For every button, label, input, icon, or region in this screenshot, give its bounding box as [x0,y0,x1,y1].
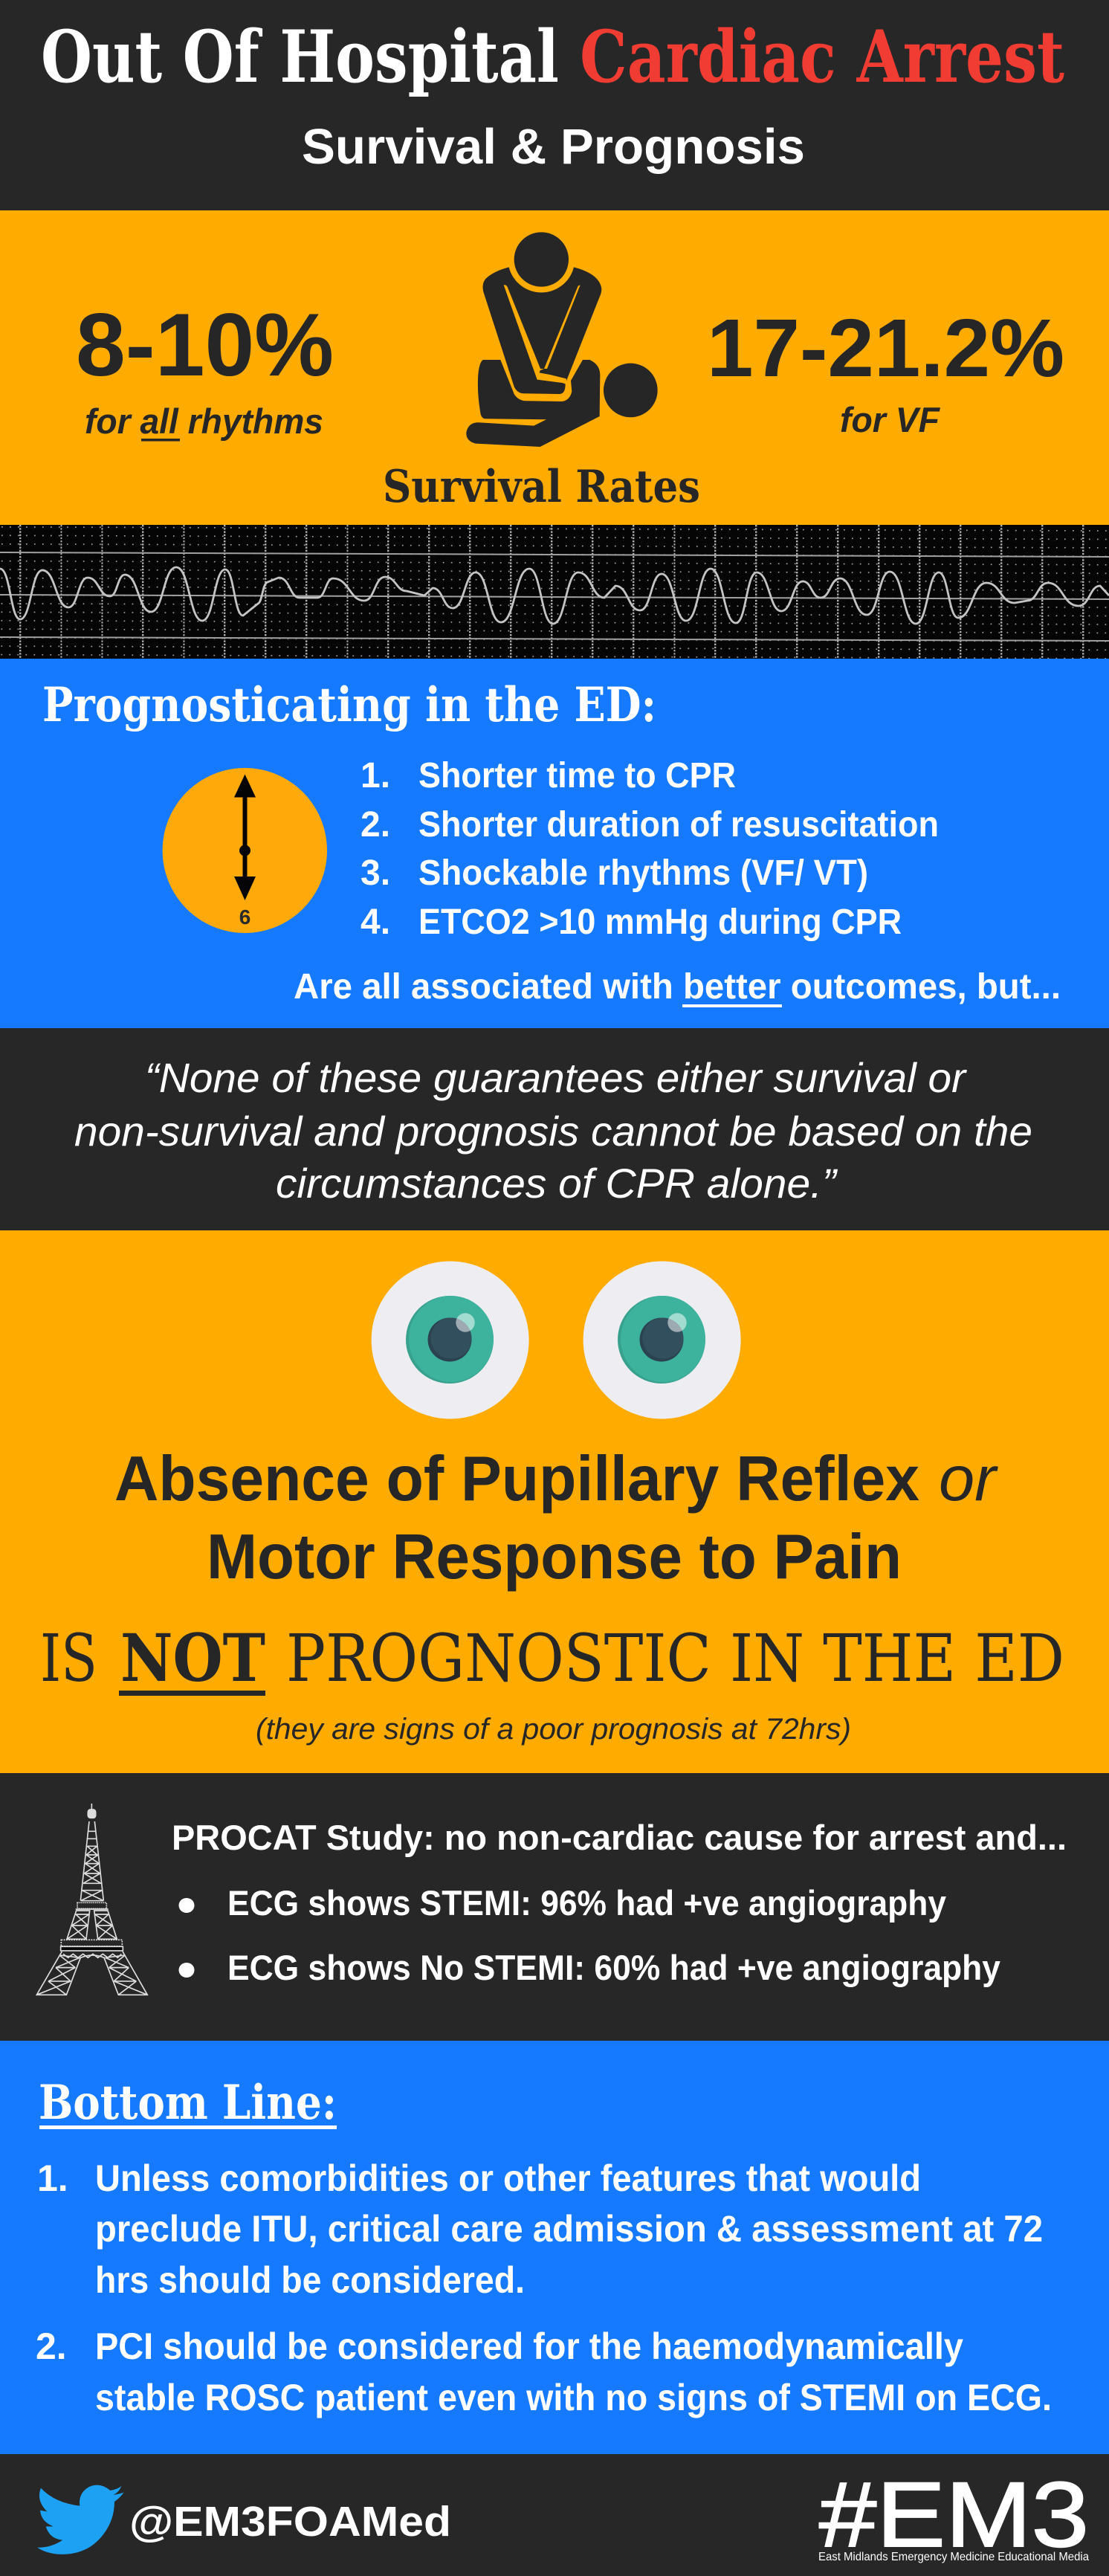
logo: EM3: #EM3 [819,2464,1089,2566]
subtitle: Survival & Prognosis [302,119,805,175]
stat: VF: 17-21.2% [707,303,1064,394]
heading: absence of reflex: or [939,1444,999,1514]
quote text: “None of these guarantees either survival or [145,1054,967,1101]
list: prognostic factors: ETCO2 >10 mmHg during CPR [418,903,902,942]
list: prognostic factors: Shockable rhythms (VF/ VT) [418,853,868,893]
heading: absence of reflex: Absence of Pupillary Reflex [114,1444,919,1514]
icon: Eiffel tower [36,1804,147,1995]
bullet: no STEMI: ECG shows No STEMI: 60% had +ve angiography [227,1948,1000,1987]
icon: CPR [466,232,658,447]
list item 1: hrs should be considered. [95,2259,525,2301]
list item 2: 2. [36,2325,67,2367]
stat: VF [707,303,1064,439]
stat: all rhythms [76,295,334,442]
panel: quote [0,1028,1109,1230]
icon: right eye [583,1261,741,1418]
panel: survival rates [0,210,1109,525]
note: poor prognosis at 72hrs: (they are signs of a poor prognosis at 72hrs) [256,1713,851,1746]
text: PROCAT study: PROCAT Study: no non-cardiac cause for arrest and... [172,1818,1067,1857]
list item 1 [37,2157,1043,2301]
icon: clock at six [163,768,327,933]
list: prognostic factors [360,756,939,942]
heading: prognosticating: Prognosticating in the ED: [42,677,656,733]
heading: bottom line: Bottom Line: [39,2075,337,2131]
list: prognostic factors: Shorter time to CPR [418,756,736,795]
list item 1: 1. [37,2157,68,2199]
heading: survival rates: Survival Rates [383,461,700,513]
panel: footer [0,2454,1109,2576]
title: Out Of Hospital [41,15,559,99]
stat: all rhythms: for all rhythms [85,401,323,441]
panel: PROCAT study [0,1773,1109,2041]
quote text: circumstances of CPR alone.” [276,1160,838,1207]
list: prognostic factors: 2. [360,805,390,845]
icon: twitter bird [37,2485,124,2554]
list: prognostic factors: Shorter duration of resuscitation [418,805,939,845]
statement: is not prognostic: NOT [120,1619,265,1697]
list item 1: preclude ITU, critical care admission & assessment at 72 [95,2208,1043,2250]
list item 1: Unless comorbidities or other features that would [95,2157,921,2199]
heading: absence of reflex [114,1444,999,1592]
list: prognostic factors: 3. [360,853,390,893]
icon: clock at six: 6 [239,906,250,929]
statement: is not prognostic: IS [40,1620,97,1697]
list: prognostic factors: 1. [360,756,390,795]
panel: prognosticating in the ED [0,659,1109,1028]
list item 2: PCI should be considered for the haemodynamically [95,2325,963,2367]
chart: ECG strip [0,525,1109,659]
list item 2: stable ROSC patient even with no signs of STEMI on ECG. [95,2377,1052,2418]
handle: @EM3FOAMed [129,2498,451,2546]
panel: title header [0,0,1109,210]
bullet: STEMI: ECG shows STEMI: 96% had +ve angiography [227,1883,946,1923]
title [41,15,1064,99]
text: better outcomes: Are all associated with better outcomes, but... [294,967,1061,1007]
quote text [74,1054,1032,1207]
list item 2 [36,2325,1052,2418]
logo: EM3: East Midlands Emergency Medicine Educational Media [818,2551,1089,2563]
stat: VF: for VF [840,400,940,439]
panel: pupillary reflex [0,1230,1109,1773]
heading: absence of reflex: Motor Response to Pain [207,1522,902,1592]
quote text: non-survival and prognosis cannot be based on the [74,1108,1032,1155]
panel: bottom line [0,2041,1109,2454]
stat: all rhythms: 8-10% [76,295,334,395]
icon: left eye [372,1261,529,1418]
list: prognostic factors: 4. [360,903,390,942]
